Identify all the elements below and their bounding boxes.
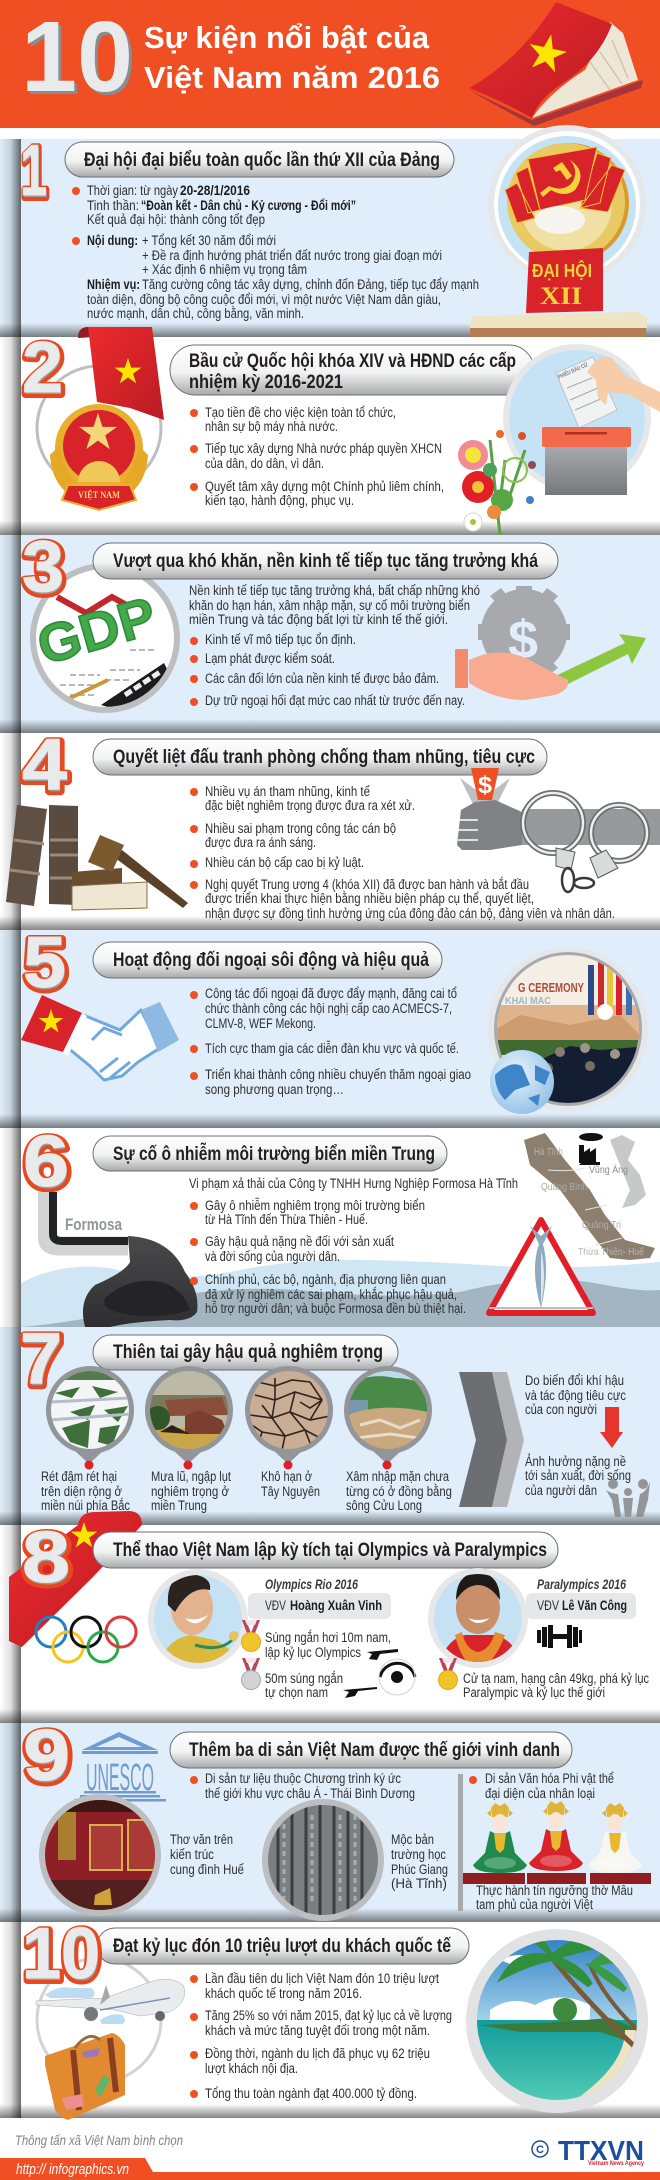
icon: suitcase [45,2033,125,2120]
text block: Nghị quyết Trung ương 4 (khóa XII) đã được ban hành và bắt đầu [205,877,529,892]
text block: Tinh thần: [87,198,139,213]
heading pill [93,1136,447,1171]
cause and effect text [525,1373,631,1498]
text block: documentary heritage: cung đình Huế [170,1862,244,1877]
number 8: 8 [23,1520,71,1600]
cause and effect text: Do biến đổi khí hậu [525,1373,624,1388]
icon: oil spill [83,1236,198,1327]
red ribbon with star [9,1511,142,1647]
text block: Quyết tâm xây dựng một Chính phủ liêm chính, [205,479,444,494]
photo circle: opening ceremony: G CEREMONY [518,980,584,995]
heading pill: Đại hội đại biểu toàn quốc lần thứ XII của Đảng [84,149,440,171]
number 4: 4 [22,725,67,805]
text block [190,405,444,508]
text block [190,986,471,1097]
cause and effect text: tới sản xuất, đời sống [525,1468,631,1483]
heading pill [170,345,534,395]
athlete: Hoàng Xuân Vinh details: tự chọn nam [265,1685,328,1700]
text block: + Đề ra định hướng phát triển đất nước trong giai đoạn mới [142,248,442,263]
captions: miền Trung [151,1498,207,1513]
text block: lượt khách nội địa. [205,2061,298,2076]
text block: của dân, do dân, vì dân. [205,456,324,471]
ribbon with star [78,327,164,420]
text block: Nhiều sai phạm trong công tác cán bộ [205,821,396,836]
icon: congress emblem: ĐẠI HỘI [532,260,592,281]
icon: olympic rings [36,1617,136,1662]
text block: khách quốc tế trong năm 2016. [205,1986,362,2001]
number 1: 1 [20,131,47,211]
text block: Nhiệm vụ: [87,277,140,292]
cause and effect text: và tác động tiêu cực [525,1388,626,1403]
text block: khách và mức tăng tuyệt đối trong một năm. [205,2023,430,2038]
text block: Dự trữ ngoại hối đạt mức cao nhất từ trước đến nay. [205,693,465,708]
text block: intangible heritage: Thực hành tín ngưỡng thờ Mẫu [476,1883,633,1898]
text block: documentary heritage: kiến trúc [170,1847,214,1862]
text block: Lạm phát được kiểm soát. [205,651,335,666]
number 7: 7 [21,1321,63,1401]
athlete: Hoàng Xuân Vinh details: lập kỷ lục Olympics [265,1645,361,1660]
cause and effect text: Ảnh hưởng nặng nề [525,1454,626,1469]
icon: handshake [21,995,179,1080]
icon: congress emblem [470,125,647,337]
number 3: 3 [23,529,65,609]
athlete: Hoàng Xuân Vinh details: VĐV [265,1598,286,1613]
icon: warning triangle with dead fish [489,1220,593,1313]
text block: Nền kinh tế tiếp tục tăng trưởng khá, bất chấp những khó [189,583,480,598]
panel: 9 Di sản [0,1716,660,1922]
athlete: Hoàng Xuân Vinh photo [148,1569,248,1669]
athlete: Hoàng Xuân Vinh details [242,1577,415,1700]
national emblem: VIỆT NAM [78,490,120,500]
text block: 20-28/1/2016 [180,183,250,198]
ring behind emblem [37,366,161,490]
text block: Nhiều cán bộ cấp cao bị kỷ luật. [205,855,364,870]
text block: được đưa ra ánh sáng. [205,835,316,850]
text block: documentary heritage: Thơ văn trên [170,1832,233,1847]
captions: Tây Nguyên [261,1484,320,1499]
captions: miền núi phía Bắc [41,1498,130,1513]
text block: + Tổng kết 30 năm đổi mới [142,233,276,248]
text block: documentary heritage: (Hà Tĩnh) [391,1876,447,1891]
captions: trên diện rộng ở [41,1484,122,1499]
heading pill [93,739,547,775]
map of central Vietnam: Quảng Trị [582,1219,621,1231]
heading pill [93,942,442,978]
ring behind plane [37,1958,161,2082]
heading pill [93,1532,558,1568]
icon: Formosa pipe: Formosa [65,1215,122,1234]
heading pill: Sự cố ô nhiễm môi trường biển miền Trung [113,1141,435,1165]
text block: nhân sự bộ máy nhà nước. [205,419,338,434]
captions: Mưa lũ, ngập lụt [151,1469,231,1484]
orange footer strip with url: http:// infographics.vn [16,2162,129,2178]
text block: Nội dung: [87,233,138,248]
athlete: Lê Văn Công details: Paralympics 2016 [537,1577,626,1592]
panel: 5 Đối ngoại [0,923,660,1128]
heading pill: Bầu cử Quốc hội khóa XIV và HĐND các cấp [189,350,516,372]
captions: Rét đậm rét hại [41,1469,117,1484]
text block: Tiếp tục xây dựng Nhà nước pháp quyền XHCN [205,441,442,456]
text block: miền Trung và tác động bất lợi từ kinh tế thế giới. [189,612,448,627]
icon: three Mother Goddess statues [463,1801,651,1884]
text block: documentary heritage: Phúc Giang [391,1862,448,1877]
captions: Xâm nhập mặn chưa [346,1469,449,1484]
text block [72,183,479,321]
number 6: 6 [23,1122,69,1202]
photo circle: opening ceremony [488,947,650,1111]
number 6: 6 [24,1124,70,1204]
athlete: Hoàng Xuân Vinh details: Olympics Rio 2016 [265,1577,358,1592]
text block: đã xử lý nghiêm các sai phạm, khắc phục hậu quả, [205,1287,457,1302]
red down arrow [600,1407,623,1448]
panel: 1 Đại hội XII [0,125,660,337]
photo circle: woodblocks [262,1799,384,1921]
heading pill [97,1928,469,1964]
athlete: Hoàng Xuân Vinh details: Súng ngắn hơi 10m nam, [265,1630,391,1645]
big number 10: 10 [21,1,133,113]
chevron arrow [459,1372,524,1507]
number 4: 4 [23,727,68,807]
text block: “Đoàn kết - Dân chủ - Kỷ cương - Đổi mới” [141,198,356,213]
text block: đặc biệt nghiêm trọng được đưa ra xét xử. [205,798,415,813]
GDP circle photo [31,566,177,712]
panel: 4 Tham nhũng [0,725,660,930]
number 9: 9 [24,1718,71,1798]
TTXVN logo: TTXVN [558,2135,644,2166]
heading pill [93,1335,398,1370]
number 9: 9 [23,1716,70,1796]
national emblem [50,404,148,510]
heading pill: Vượt qua khó khăn, nền kinh tế tiếp tục tăng trưởng khá [113,550,538,572]
credit line: Thông tấn xã Việt Nam bình chọn [15,2132,183,2148]
number 3: 3 [22,527,64,607]
footer [0,2132,660,2180]
captions: nghiêm trọng ở [151,1484,229,1499]
icon: gear with dollar [478,586,570,678]
text block: Tổng thu toàn ngành đạt 400.000 tỷ đồng. [205,2086,417,2101]
pin: flood photo [145,1366,233,1470]
number 7: 7 [20,1319,62,1399]
text block: từ Hà Tĩnh đến Thừa Thiên - Huế. [205,1212,368,1227]
text block: toàn diện, đồng bộ công cuộc đổi mới, vì một nước Việt Nam dân giàu, [87,292,441,307]
TTXVN logo: Vietnam News Agency [588,2161,645,2167]
text block: Gây ô nhiễm nghiêm trọng môi trường biển [205,1198,425,1213]
text block: khăn do hạn hán, xâm nhập mặn, sự cố môi trường biển [189,598,470,613]
text block [190,1971,452,2101]
pin: cold snap photo [46,1366,134,1470]
athlete: Lê Văn Công photo [428,1568,528,1668]
text block: và đời sống của người dân. [205,1249,340,1264]
title [144,20,440,95]
text block: Nhiều vụ án tham nhũng, kinh tế [205,784,370,799]
panel: 8 Thể thao [0,1511,660,1723]
number 10: 10 [23,1916,101,1996]
text block [189,583,480,708]
icon: hand with growth arrow [455,634,646,700]
number 10: 10 [22,1914,100,1994]
heading pill: Thiên tai gây hậu quả nghiêm trọng [113,1341,383,1363]
icon: fist with money in handcuffs: $ [478,772,493,799]
athlete: Lê Văn Công details: Paralympic và kỷ lục thế giới [463,1685,605,1700]
athlete: Hoàng Xuân Vinh details: 50m súng ngắn [265,1671,343,1686]
icon: ballot box: PHIẾU BẦU CỬ [557,361,589,381]
text block [189,1176,518,1316]
captions: Khô hạn ở [261,1469,312,1484]
text block: Lần đầu tiên du lịch Việt Nam đón 10 triệu lượt [205,1971,439,1986]
text block: Chính phủ, các bộ, ngành, địa phương liên quan [205,1272,446,1287]
text block: documentary heritage: Mộc bản [391,1832,434,1847]
cause and effect text: của người dân [525,1483,597,1498]
text block: nước mạnh, dân chủ, công bằng, văn minh. [87,306,304,321]
sea waves [21,1260,660,1327]
panel: 2 Bầu cử [0,327,660,535]
icon: factory [579,1133,603,1165]
text block: song phương quan trọng… [205,1082,344,1097]
divider [458,1774,463,1911]
text block: documentary heritage: thế giới khu vực châu Á - Thái Bình Dương [205,1786,415,1801]
number 5: 5 [23,923,66,1003]
text block: Tạo tiền đề cho việc kiện toàn tổ chức, [205,405,396,420]
text block: intangible heritage: Di sản Văn hóa Phi vật thể [485,1771,614,1786]
photo circle: tropical beach [466,1929,648,2113]
text block: documentary heritage [170,1771,448,1891]
heading pill: Hoạt động đối ngoại sôi động và hiệu quả [113,949,429,971]
captions: sông Cửu Long [346,1498,422,1513]
text block: hỗ trợ người dân; và buộc Formosa đền bù thiệt hại. [205,1301,466,1316]
text block: Tích cực tham gia các diễn đàn khu vực và quốc tế. [205,1041,459,1056]
text block: chức thành công các hội nghị cấp cao ACMECS-7, [205,1001,452,1016]
text block: Các cân đối lớn của nền kinh tế được bảo đảm. [205,671,439,686]
pin: drought photo [245,1366,333,1470]
text block: Kết quả đại hội: thành công tốt đẹp [87,212,265,227]
athlete: Lê Văn Công details: Lê Văn Công [562,1598,627,1613]
number 2: 2 [23,330,64,410]
text block: Gây hậu quả nặng nề đối với sản xuất [205,1234,394,1249]
heading pill: Thể thao Việt Nam lập kỳ tích tại Olympics và Paralympics [113,1539,547,1561]
text block [190,784,615,921]
icon: congress emblem: XII [540,283,582,310]
captions [41,1469,452,1513]
athlete: Lê Văn Công details: VĐV [537,1598,559,1613]
text block: Tăng 25% so với năm 2015, đạt kỷ lục cả về lượng [205,2008,452,2023]
text block: Tăng cường công tác xây dựng, chỉnh đốn Đảng, tiếp tục đẩy mạnh [142,277,479,292]
text block: documentary heritage: Di sản tư liệu thuộc Chương trình ký ức [205,1771,401,1786]
text block: CLMV-8, WEF Mekong. [205,1016,316,1031]
heading pill [93,543,558,579]
athlete: Lê Văn Công details [438,1577,649,1700]
icon: ballot box [503,344,660,495]
text block: Kinh tế vĩ mô tiếp tục ổn định. [205,632,356,647]
athlete: Hoàng Xuân Vinh details: Hoàng Xuân Vinh [290,1598,382,1613]
text block: + Xác định 6 nhiệm vụ trọng tâm [142,262,307,277]
text block: được triển khai thực hiện bằng nhiều biện pháp cụ thể, quyết liệt, [205,891,534,906]
number 1: 1 [21,133,48,213]
heading pill: Thêm ba di sản Việt Nam được thế giới vinh danh [189,1739,560,1761]
heading pill [65,142,454,177]
text block: Triển khai thành công nhiều chuyến thăm ngoại giao [205,1067,471,1082]
captions: từng có ở đồng bằng [346,1484,452,1499]
TTXVN logo: C [536,2144,544,2156]
icon: fist with money in handcuffs [457,768,660,892]
text block: Thời gian: từ ngày [87,183,178,198]
number 1 [20,131,48,213]
map of central Vietnam: Vũng Áng [589,1163,628,1176]
pin: saltwater intrusion photo [344,1366,432,1470]
panel: 3 Kinh tế [0,527,660,733]
text block: intangible heritage [469,1771,633,1912]
panel: 9 Di sản: UNESCO [86,1757,154,1799]
icon: flowers [458,430,536,535]
text block: documentary heritage: trường học [391,1847,446,1862]
text block: intangible heritage: tam phủ của người Việt [476,1897,593,1912]
icon: gear with dollar: $ [508,610,538,670]
panel: 10 Du lịch [0,1914,660,2120]
icon: law books and gavel [6,805,188,910]
text block: Công tác đối ngoại đã được đẩy mạnh, đăng cai tổ [205,986,457,1001]
map of central Vietnam: Thừa Thiên- Huế [578,1246,644,1258]
icon: Formosa pipe [48,1192,128,1246]
map of central Vietnam: Hà Tĩnh [534,1146,563,1158]
number 8: 8 [22,1518,70,1598]
number 5: 5 [24,925,67,1005]
photo circle: opening ceremony: KHAI MẠC [505,996,551,1007]
text block: kiến tạo, hành động, phục vụ. [205,493,354,508]
heading pill [170,1732,572,1768]
photo circle: Hue architecture [39,1794,161,1916]
map of central Vietnam: Quảng Bình [541,1181,587,1193]
big number 10: 10 [24,4,136,116]
number 2: 2 [22,328,63,408]
text block: Đồng thời, ngành du lịch đã phục vụ 62 triệu [205,2046,430,2061]
cause and effect text: của con người [525,1402,597,1417]
orange footer strip with url [0,2158,660,2180]
heading pill: nhiệm kỳ 2016-2021 [189,371,343,393]
panel: 6 Môi trường biển [0,1122,660,1327]
GDP circle photo: GDP [31,586,163,677]
heading pill: Đạt kỷ lục đón 10 triệu lượt du khách quốc tế [113,1935,451,1957]
title: Việt Nam năm 2016 [144,60,440,95]
text block: Vi phạm xả thải của Công ty TNHH Hưng Nghiệp Formosa Hà Tĩnh [189,1176,518,1191]
icon: red book [469,2,643,126]
header band [0,0,660,128]
icon: UNESCO logo [74,1732,166,1802]
icon: people [606,1479,650,1517]
icon: globe [490,1050,554,1114]
text block: intangible heritage: đại diện của nhân loại [485,1786,595,1801]
title: Sự kiện nổi bật của [144,20,430,55]
panel: 7 Thiên tai [0,1319,660,1525]
icon: airplane [36,1979,185,2024]
map of central Vietnam [524,1133,655,1260]
heading pill: Quyết liệt đấu tranh phòng chống tham nhũng, tiêu cực [113,746,535,768]
